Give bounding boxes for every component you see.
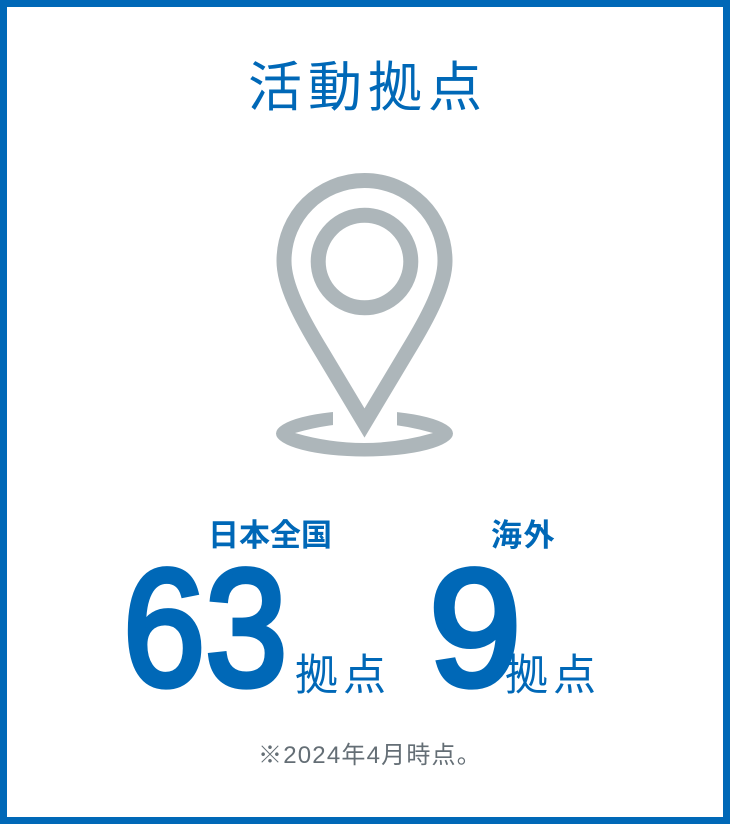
pin inner circle (318, 215, 411, 308)
icon: location pin (276, 180, 453, 456)
footnote: ※2024年4月時点。 (258, 742, 482, 769)
unit: Japan bases: 拠点 (295, 652, 391, 700)
number: 9: 9 (429, 536, 521, 721)
unit: overseas bases: 拠点 (505, 652, 601, 700)
label: overseas: 海外 (491, 518, 556, 553)
pin outline (284, 180, 445, 423)
label: Japan: 日本全国 (208, 518, 332, 553)
number: 63: 63 (123, 536, 287, 721)
title: 活動拠点 (248, 58, 488, 118)
ground ring (276, 410, 453, 456)
